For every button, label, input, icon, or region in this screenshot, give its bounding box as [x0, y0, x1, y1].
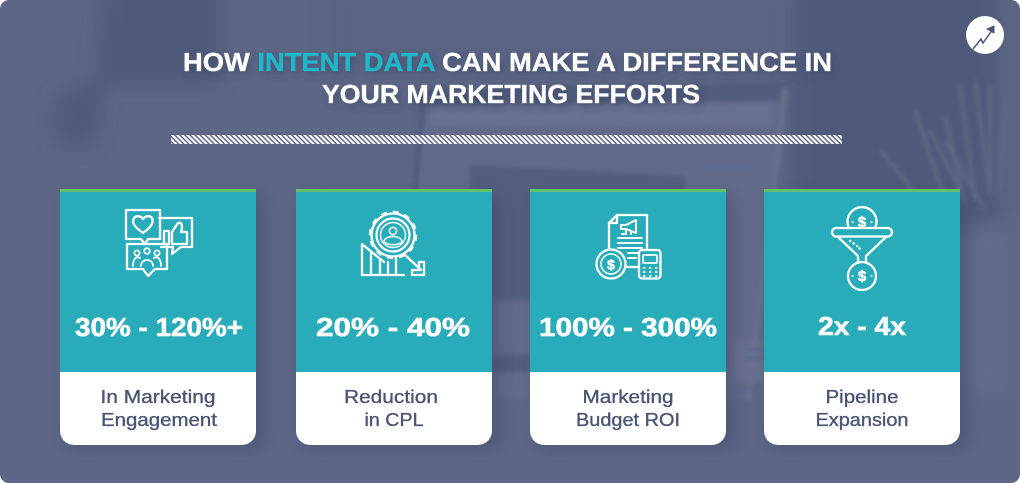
icon glyph: dollar sign: $: [607, 256, 615, 272]
icon: document, coin and calculator: [596, 215, 660, 278]
icon: growth arrow badge: [966, 16, 1004, 54]
label: [576, 386, 680, 430]
label: Engagement: [101, 409, 217, 430]
label: Marketing: [582, 386, 674, 407]
label: [100, 386, 217, 430]
icon glyphs: dollar signs: [858, 214, 867, 285]
title: HOW INTENT DATA CAN MAKE A DIFFERENCE IN: [183, 49, 832, 77]
label: [344, 386, 438, 430]
icon glyphs: dollar signs: $: [858, 214, 867, 231]
label: Pipeline: [826, 386, 898, 407]
hatched divider: [171, 135, 842, 144]
label: in CPL: [364, 409, 424, 430]
panel: reduction in CPL: [296, 189, 500, 449]
label: Budget ROI: [576, 409, 680, 430]
stat: 30% - 120%+: [75, 312, 243, 342]
icon: gear badge with falling chart: [362, 212, 424, 275]
title: [183, 49, 832, 109]
panel: pipeline expansion: [764, 189, 968, 449]
icon: social speech bubbles: [126, 210, 192, 276]
panel: marketing engagement: [60, 189, 264, 449]
panel: marketing budget ROI: [530, 189, 734, 449]
label: Expansion: [816, 409, 908, 430]
icon glyphs: dollar signs: $: [858, 268, 867, 285]
label: [816, 386, 908, 430]
label: Reduction: [344, 386, 438, 407]
label: In Marketing: [100, 386, 216, 407]
stat: 2x - 4x: [818, 311, 907, 341]
icon: sales funnel with coins: [832, 207, 892, 290]
stat: 20% - 40%: [316, 312, 470, 342]
title: YOUR MARKETING EFFORTS: [322, 81, 700, 109]
stat: 100% - 300%: [539, 312, 717, 342]
